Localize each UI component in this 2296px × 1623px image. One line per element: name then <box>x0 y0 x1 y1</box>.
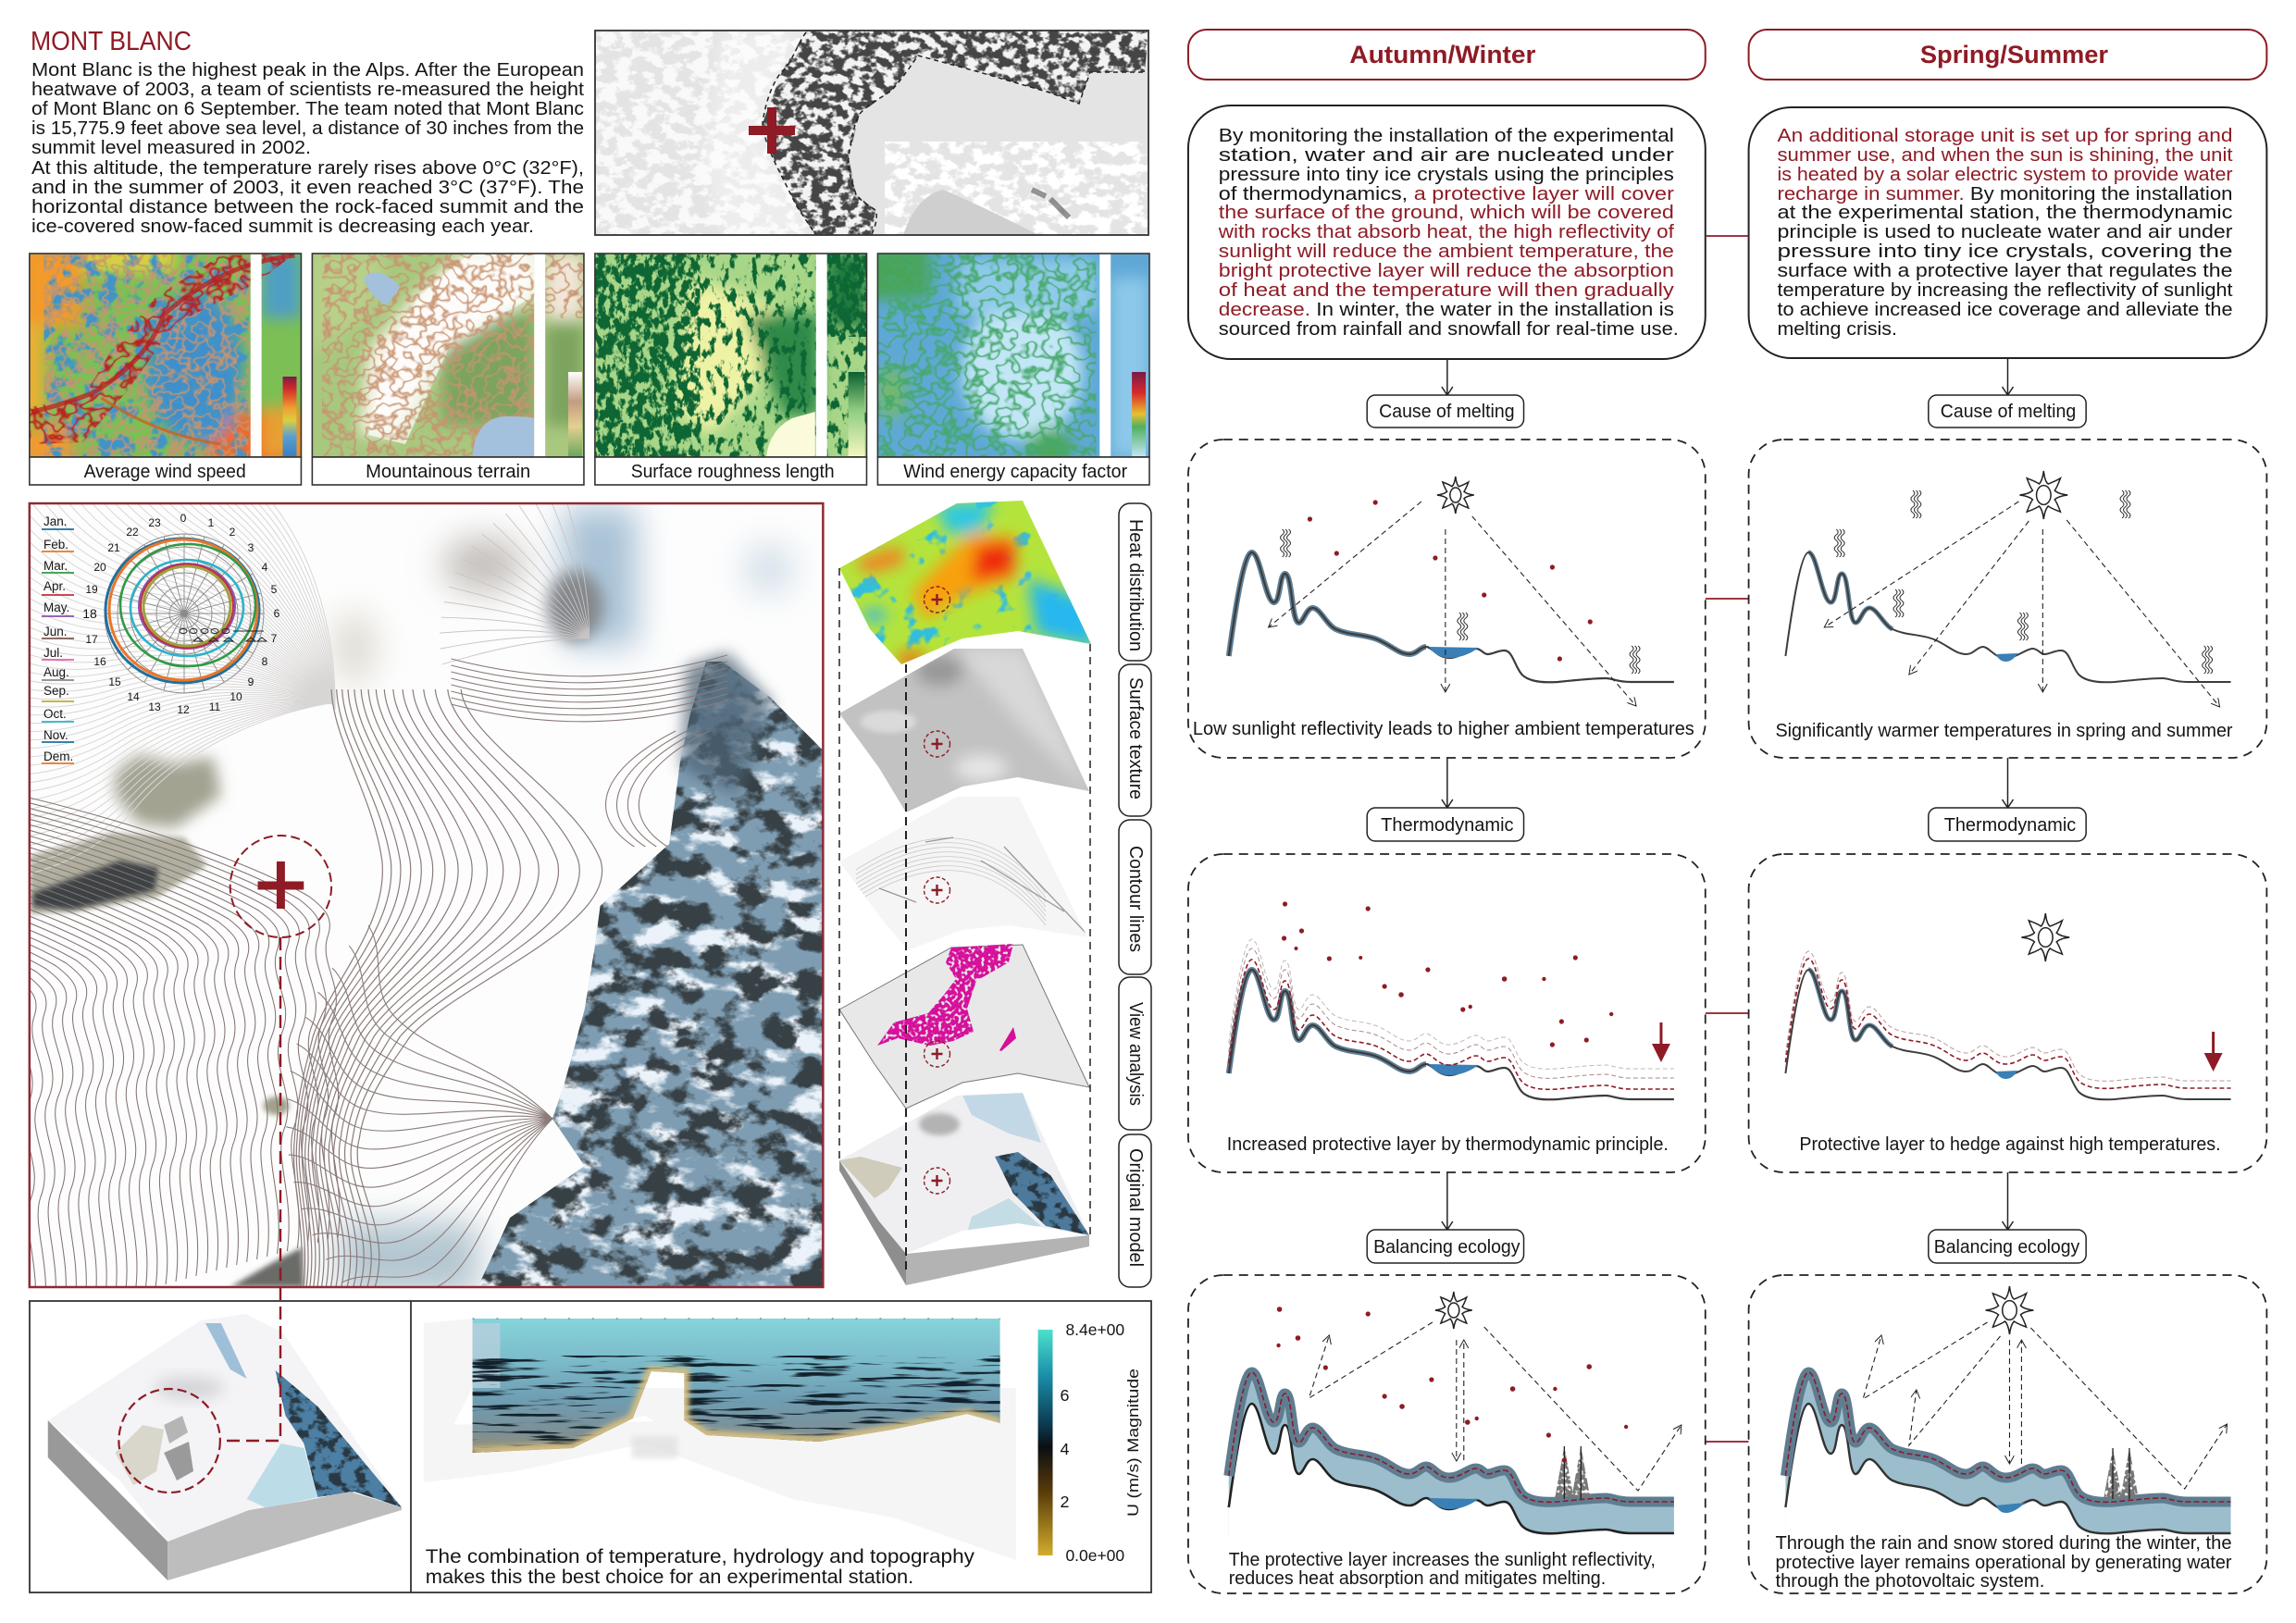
text block: intro <box>31 59 584 237</box>
diagram: balancing ecology spring <box>1749 1275 2266 1593</box>
sunlight arrows <box>1309 1322 1682 1491</box>
caption: The protective layer increases the sunlight reflectivity, <box>1229 1550 1656 1570</box>
sunlight arrows <box>1269 502 1636 706</box>
step pill: balancing ecology (spring) <box>1929 1230 2086 1263</box>
icon: location marker circle <box>230 836 331 937</box>
colour bar legend: 4 <box>1060 1440 1069 1458</box>
colour bar legend: U (m/s) Magnitude <box>1124 1369 1142 1517</box>
caption: Significantly warmer temperatures in spring and summer <box>1775 721 2233 741</box>
chart: polar diagram <box>82 512 280 716</box>
diagram: protective layer thermodynamic <box>1188 854 1706 1172</box>
step pill: thermodynamic (spring): Thermodynamic <box>1944 815 2076 836</box>
chart: polar diagram: 14 <box>127 690 140 703</box>
step pill: balancing ecology (autumn) <box>1367 1230 1524 1263</box>
dashed guide lines <box>839 568 1090 1235</box>
icon: marker <box>924 731 949 757</box>
caption: Through the rain and snow stored during the winter, the <box>1775 1533 2232 1554</box>
icon: sun <box>2021 913 2069 961</box>
step pill: thermodynamic (autumn): Thermodynamic <box>1381 815 1514 836</box>
label <box>877 457 1149 485</box>
layer name tabs: Original model <box>1125 1148 1146 1267</box>
red particles <box>1282 901 1613 1047</box>
heading: Autumn/Winter <box>1188 30 1706 80</box>
colour bar legend: 8.4e+00 <box>1065 1320 1124 1339</box>
text block: intro: horizontal distance between the rock-faced summit and the <box>31 196 584 217</box>
CFD section chart <box>424 1319 1016 1560</box>
step pill: cause of melting (spring): Cause of melting <box>1941 402 2076 422</box>
text panel: spring summer: surface with a protective layer that regulates the <box>1777 260 2233 281</box>
panel: bottom site section frame <box>30 1301 1151 1592</box>
heading: Spring/Summer: Spring/Summer <box>1920 41 2109 68</box>
text block: intro: heatwave of 2003, a team of scientists re-measured the height <box>31 79 584 100</box>
text panel: autumn winter: decrease. In winter, the water in the installation is <box>1219 299 1674 320</box>
layer: surface texture <box>840 649 1089 812</box>
chart: polar diagram: 3 <box>248 541 254 554</box>
text block: intro: ice-covered snow-faced summit is decreasing each year. <box>31 216 534 237</box>
chart: polar diagram: 7 <box>271 632 278 645</box>
panel: main aerial contour map <box>28 502 825 1288</box>
layer: contour lines <box>839 797 1087 950</box>
label text: Mountainous terrain <box>366 462 530 482</box>
colour bar legend: 6 <box>1060 1386 1069 1405</box>
text panel: autumn winter: sunlight will reduce the ambient temperature, the <box>1219 241 1674 262</box>
chart: polar diagram: 8 <box>262 655 268 668</box>
caption <box>1229 1550 1656 1589</box>
chart: polar diagram: 0 <box>180 512 187 525</box>
text block: intro: and in the summer of 2003, it even reached 3°C (37°F). The <box>31 177 584 198</box>
icon: sun <box>1435 1292 1472 1329</box>
text panel: spring summer: An additional storage unit is set up for spring and <box>1777 125 2233 146</box>
caption: site choice: makes this the best choice for an experimental station. <box>426 1567 913 1588</box>
layer name tabs: View analysis <box>1125 1002 1146 1106</box>
map panel: mountainous terrain <box>312 254 584 485</box>
layer name tabs: Heat distribution <box>1125 519 1146 651</box>
step pill: thermodynamic (spring) <box>1929 808 2086 841</box>
diagram: balancing ecology autumn <box>1188 1275 1706 1593</box>
map panel: surface roughness length <box>595 254 866 485</box>
text panel: spring summer: temperature by increasing the reflectivity of sunlight <box>1777 279 2233 301</box>
colour bar legend: 0.0e+00 <box>1065 1546 1124 1565</box>
caption: Protective layer to hedge against high temperatures. <box>1799 1134 2221 1155</box>
caption: through the photovoltaic system. <box>1775 1571 2044 1592</box>
arrow: downward pressure <box>2204 1032 2223 1072</box>
sunlight arrows <box>1824 502 2220 707</box>
label text: Surface roughness length <box>631 462 835 482</box>
chart: polar diagram: 5 <box>271 583 278 596</box>
icon: location cross <box>258 861 304 909</box>
text block: intro: of Mont Blanc on 6 September. The team noted that Mont Blanc <box>31 98 584 119</box>
chart: polar diagram: 12 <box>177 703 190 716</box>
chart: polar monthly legend: Apr. <box>43 579 66 593</box>
text panel: autumn winter: pressure into tiny ice crystals using the principles <box>1219 164 1674 185</box>
chart: polar diagram: 9 <box>248 675 254 688</box>
text block: intro: summit level measured in 2002. <box>31 137 311 158</box>
text panel: autumn winter: the surface of the ground, which will be covered <box>1219 202 1674 223</box>
caption: reduces heat absorption and mitigates melting. <box>1229 1568 1606 1589</box>
icon: sun <box>2019 471 2067 519</box>
arrow: downward pressure <box>1652 1022 1670 1062</box>
step pill: cause of melting (autumn): Cause of melting <box>1379 402 1515 422</box>
label text: Wind energy capacity factor <box>903 462 1127 482</box>
chart: polar monthly legend: Jun. <box>43 625 68 638</box>
locator map <box>595 31 1148 235</box>
chart: polar monthly legend: Sep. <box>43 684 69 698</box>
chart: polar diagram: 20 <box>93 561 106 574</box>
step pill: cause of melting (autumn) <box>1367 395 1524 427</box>
title: MONT BLANC <box>31 27 192 56</box>
layer name tabs: Contour lines <box>1125 846 1146 952</box>
caption: site choice: The combination of temperature, hydrology and topography <box>426 1546 974 1567</box>
text panel: autumn winter: of thermodynamics, a protective layer will cover <box>1219 183 1674 204</box>
chart: polar diagram: 11 <box>209 700 221 713</box>
caption <box>1775 1533 2232 1592</box>
text block: intro: Mont Blanc is the highest peak in the Alps. After the European <box>31 59 584 81</box>
layer: original model <box>833 1087 1097 1285</box>
text panel: autumn winter <box>1188 105 1706 359</box>
chart: polar monthly legend: Feb. <box>43 538 68 551</box>
step pill: balancing ecology (spring): Balancing ecology <box>1934 1237 2079 1258</box>
icon: marker <box>924 587 949 613</box>
icon: trees <box>1555 1446 1590 1499</box>
flow arrows <box>1442 358 2013 1230</box>
text panel: autumn winter: sourced from rainfall and snowfall for real-time use. <box>1219 318 1679 340</box>
chart: polar monthly legend: Oct. <box>43 707 67 721</box>
text panel: autumn winter: of heat and the temperature will then gradually <box>1219 279 1675 301</box>
chart: polar diagram: 21 <box>107 541 120 554</box>
label <box>312 457 584 485</box>
layer: view analysis <box>839 944 1089 1109</box>
chart: polar monthly legend: Dem. <box>43 750 73 763</box>
text panel: spring summer <box>1749 107 2266 358</box>
3D site model <box>37 1305 415 1580</box>
icon: marker <box>924 1168 949 1194</box>
chart: polar diagram: 23 <box>148 516 161 529</box>
red particles <box>1308 500 1593 662</box>
diagram: protective layer high temperatures <box>1749 854 2266 1172</box>
icon: sun <box>1986 1286 2033 1334</box>
text panel: autumn winter: station, water and air are nucleated under <box>1219 144 1674 166</box>
heading: Autumn/Winter: Autumn/Winter <box>1349 41 1536 68</box>
chart: polar monthly legend: Mar. <box>43 559 68 573</box>
locator map frame <box>595 31 1148 235</box>
colour bar legend <box>1038 1320 1142 1565</box>
caption: site choice <box>426 1546 974 1588</box>
icon: marker <box>924 877 949 903</box>
text panel: spring summer: melting crisis. <box>1777 318 1897 340</box>
text block: intro: At this altitude, the temperature rarely rises above 0°C (32°F), <box>31 157 584 179</box>
heading: Spring/Summer <box>1749 30 2266 80</box>
map panel: average wind speed <box>19 244 308 485</box>
chart: polar diagram: 16 <box>93 655 106 668</box>
step pill: thermodynamic (autumn) <box>1367 808 1524 841</box>
text panel: spring summer: to achieve increased ice coverage and alleviate the <box>1777 299 2233 320</box>
text panel: spring summer: pressure into tiny ice crystals, covering the <box>1777 241 2233 262</box>
text panel: spring summer: recharge in summer. By monitoring the installation <box>1777 183 2233 204</box>
icon: marker circle <box>118 1389 220 1493</box>
chart: polar monthly legend: Aug. <box>43 665 69 679</box>
step pill: cause of melting (spring) <box>1929 395 2086 427</box>
text panel: spring summer: is heated by a solar electric system to provide water <box>1777 164 2233 185</box>
arrow: connector from main map to site model <box>220 937 280 1441</box>
chart: polar diagram: 18 <box>82 606 97 621</box>
label <box>595 457 866 485</box>
chart: polar monthly legend: Jan. <box>43 514 68 528</box>
chart: polar diagram: 1 <box>208 516 215 529</box>
step pill: balancing ecology (autumn): Balancing ecology <box>1373 1237 1520 1258</box>
season connectors <box>1706 236 1749 1442</box>
icon: sun <box>1437 477 1474 514</box>
layer name tabs <box>1119 503 1151 1287</box>
chart: polar monthly legend: Jul. <box>43 646 63 660</box>
layer: heat distribution <box>839 501 1091 664</box>
colour bar legend: 2 <box>1060 1493 1069 1511</box>
caption: Increased protective layer by thermodynamic principle. <box>1227 1134 1669 1155</box>
map panel: wind energy capacity factor <box>865 244 1149 485</box>
icons: heat waves <box>1281 529 1640 674</box>
chart: polar monthly legend: Nov. <box>43 728 68 742</box>
text panel: autumn winter: with rocks that absorb heat, the high reflectivity of <box>1218 221 1674 242</box>
right column: seasonal comparison <box>1188 30 2266 1593</box>
text block: intro: is 15,775.9 feet above sea level, a distance of 30 inches from the <box>31 118 584 139</box>
chart: polar monthly legend <box>42 514 74 763</box>
icon: trees <box>2104 1448 2139 1499</box>
chart: polar diagram: 15 <box>108 675 121 688</box>
chart: polar monthly legend: May. <box>43 601 69 614</box>
text panel: spring summer: at the experimental station, the thermodynamic <box>1777 202 2233 223</box>
label text: Average wind speed <box>84 462 246 482</box>
layer name tabs: Surface texture <box>1125 677 1146 799</box>
diagram: low reflectivity <box>1188 440 1706 758</box>
diagram: warmer temperatures <box>1749 440 2266 758</box>
chart: polar diagram: 22 <box>126 526 139 539</box>
sunlight arrows <box>1863 1322 2228 1489</box>
text panel: autumn winter: bright protective layer will reduce the absorption <box>1219 260 1674 281</box>
chart: polar diagram: 13 <box>148 700 161 713</box>
text panel: spring summer: summer use, and when the sun is shining, the unit <box>1777 144 2233 166</box>
chart: polar diagram: 2 <box>230 526 236 539</box>
icon: location cross on map <box>749 107 795 154</box>
chart: polar diagram: 19 <box>85 583 98 596</box>
caption: Low sunlight reflectivity leads to higher ambient temperatures <box>1193 719 1694 739</box>
text panel: spring summer: principle is used to nucleate water and air under <box>1777 221 2233 242</box>
chart: polar diagram: 4 <box>262 561 268 574</box>
chart: polar diagram: 17 <box>85 633 98 646</box>
chart: polar diagram: 10 <box>230 690 242 703</box>
text panel: autumn winter: By monitoring the installation of the experimental <box>1219 125 1674 146</box>
label <box>30 457 301 485</box>
chart: polar diagram: 6 <box>274 607 280 620</box>
icon: marker <box>924 1041 949 1067</box>
icons: heat waves <box>1834 490 2213 674</box>
layer stack: terrain analysis layers <box>833 495 1097 1285</box>
thumbnails row <box>19 244 1149 485</box>
caption: protective layer remains operational by generating water <box>1775 1553 2232 1573</box>
red particles <box>1276 1307 1628 1463</box>
